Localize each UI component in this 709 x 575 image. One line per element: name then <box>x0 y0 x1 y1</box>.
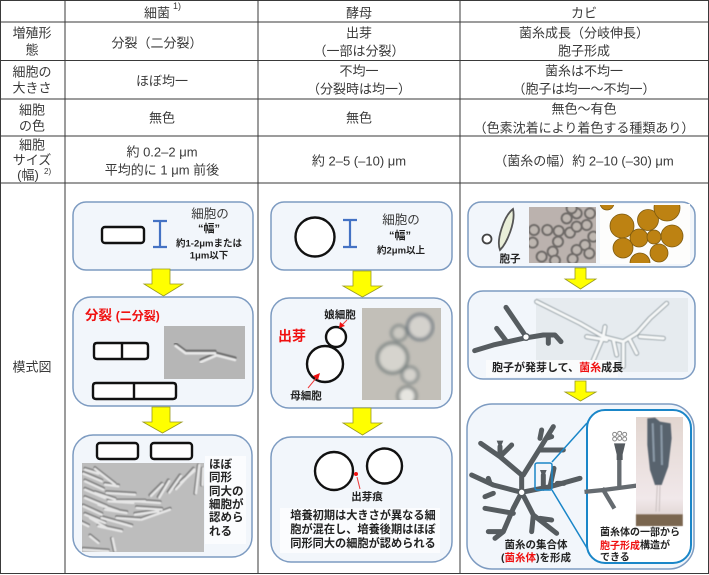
row: cell colour <box>19 102 694 136</box>
panel: spores <box>468 195 695 273</box>
row: growth form: 出芽 <box>346 26 372 40</box>
panel: uniform bacteria cells: ほぼ <box>209 458 232 471</box>
panel: budding: 娘細胞 <box>324 308 356 321</box>
row: growth form: 分裂（二分裂） <box>111 36 203 50</box>
row: cell colour: 無色～有色 <box>551 102 617 116</box>
table header row: カビ <box>571 6 597 20</box>
panel: yeast cell width <box>271 202 452 270</box>
row: cell size uniformity: 菌糸は不均一 <box>545 64 623 78</box>
row: cell width <box>13 138 674 182</box>
panel: bud scar and note: 培養初期は大きさが異なる細 <box>290 508 436 522</box>
row: cell colour: 無色 <box>346 110 372 126</box>
row: cell size uniformity <box>12 64 656 96</box>
arrow: down <box>343 271 382 297</box>
panel: uniform bacteria cells <box>73 435 252 557</box>
table header row: 1) <box>173 1 181 11</box>
row: growth form: 菌糸成長（分岐伸長） <box>519 26 649 40</box>
column: mold <box>467 195 695 569</box>
panel: bacteria cell width: 約1-2μmまたは <box>176 238 242 250</box>
panel: spores: 胞子 <box>500 252 521 265</box>
arrow: down <box>565 381 596 401</box>
row: cell colour: （色素沈着により着色する種類あり） <box>474 120 694 136</box>
panel: budding <box>271 298 452 408</box>
panel: bacteria cell width: 1μm以下 <box>190 250 229 262</box>
table header row: 酵母 <box>346 6 372 20</box>
panel: bacteria cell width <box>73 202 253 270</box>
panel: yeast cell width: “幅” <box>389 228 411 242</box>
panel: bacteria cell width: “幅” <box>198 221 220 235</box>
panel: germination and hyphal growth: 胞子が発芽して、菌糸成長 <box>492 360 623 374</box>
row: growth form: 増殖形 <box>12 26 52 40</box>
panel: uniform bacteria cells: れる <box>209 525 232 538</box>
panel: budding: 母細胞 <box>290 389 322 402</box>
panel: budding: 出芽 <box>278 328 306 344</box>
callout: zoomed spore structure: 菌糸体の一部から <box>600 526 680 538</box>
row: cell size uniformity: 不均一 <box>339 64 379 78</box>
icon: mycelium colony <box>472 427 580 538</box>
panel: germination and hyphal growth <box>468 291 695 379</box>
row: cell width: 約 0.2–2 μm <box>126 144 198 160</box>
panel: uniform bacteria cells: 同大の <box>209 484 244 498</box>
row: cell size uniformity: （分裂時は均一） <box>307 82 411 96</box>
row: cell width: 2) <box>44 167 51 176</box>
row: cell width: 約 2–5 (–10) μm <box>312 154 406 168</box>
panel: mycelium and spore formation <box>467 404 694 569</box>
callout: zoomed spore structure <box>535 410 691 564</box>
panel: mycelium and spore formation: (菌糸体)を形成 <box>501 551 571 564</box>
callout: zoomed spore structure: できる <box>600 552 630 564</box>
panel: bud scar and note <box>271 437 452 562</box>
row: cell colour: の色 <box>19 118 45 134</box>
row: growth form: 胞子形成 <box>558 44 610 58</box>
row: cell colour: 無色 <box>149 110 175 126</box>
column: bacteria <box>73 202 253 557</box>
callout: zoomed spore structure: 胞子形成構造が <box>600 538 670 552</box>
table header row: 細菌 <box>144 6 170 20</box>
row: cell size uniformity: （胞子は均一～不均一） <box>512 82 656 96</box>
panel: bud scar and note: 胞が混在し、培養後期はほぼ <box>290 522 437 536</box>
panel: bacteria cell width: 細胞の <box>191 207 229 221</box>
panel: binary fission <box>73 297 253 406</box>
arrow: down <box>565 268 596 289</box>
row: growth form: 態 <box>25 42 39 58</box>
arrow: down <box>143 407 182 433</box>
panel: mycelium and spore formation: 菌糸の集合体 <box>504 538 568 551</box>
panel: bud scar and note: 出芽痕 <box>351 490 383 503</box>
row label: schematic: 模式図 <box>12 360 52 374</box>
panel: uniform bacteria cells: 同形 <box>209 471 232 484</box>
panel: yeast cell width: 約2μm以上 <box>377 244 426 256</box>
panel: yeast cell width: 細胞の <box>382 213 420 227</box>
arrow: down <box>144 269 183 296</box>
row: cell size uniformity: ほぼ均一 <box>136 74 188 88</box>
row: growth form: （一部は分裂） <box>313 44 405 58</box>
row: cell size uniformity: 細胞の <box>12 64 52 80</box>
column: yeast <box>271 202 452 562</box>
row: cell size uniformity: 大きさ <box>12 80 52 96</box>
row: cell width: 平均的に 1 μm 前後 <box>105 162 219 178</box>
row: cell width: サイズ <box>13 152 51 168</box>
row: cell width: (幅) <box>17 168 39 182</box>
arrow: down <box>343 408 382 435</box>
row: growth form <box>12 26 649 58</box>
panel: bud scar and note: 同形同大の細胞が認められる <box>290 536 436 550</box>
row: cell width: 細胞 <box>19 138 45 152</box>
row: cell colour: 細胞 <box>19 102 45 118</box>
panel: uniform bacteria cells: 細胞が <box>209 497 244 511</box>
panel: uniform bacteria cells: 認めら <box>209 511 244 524</box>
panel: binary fission: 分裂 (二分裂) <box>85 308 160 323</box>
row: cell width: （菌糸の幅）約 2–10 (–30) μm <box>494 154 674 168</box>
table header row <box>144 1 597 20</box>
